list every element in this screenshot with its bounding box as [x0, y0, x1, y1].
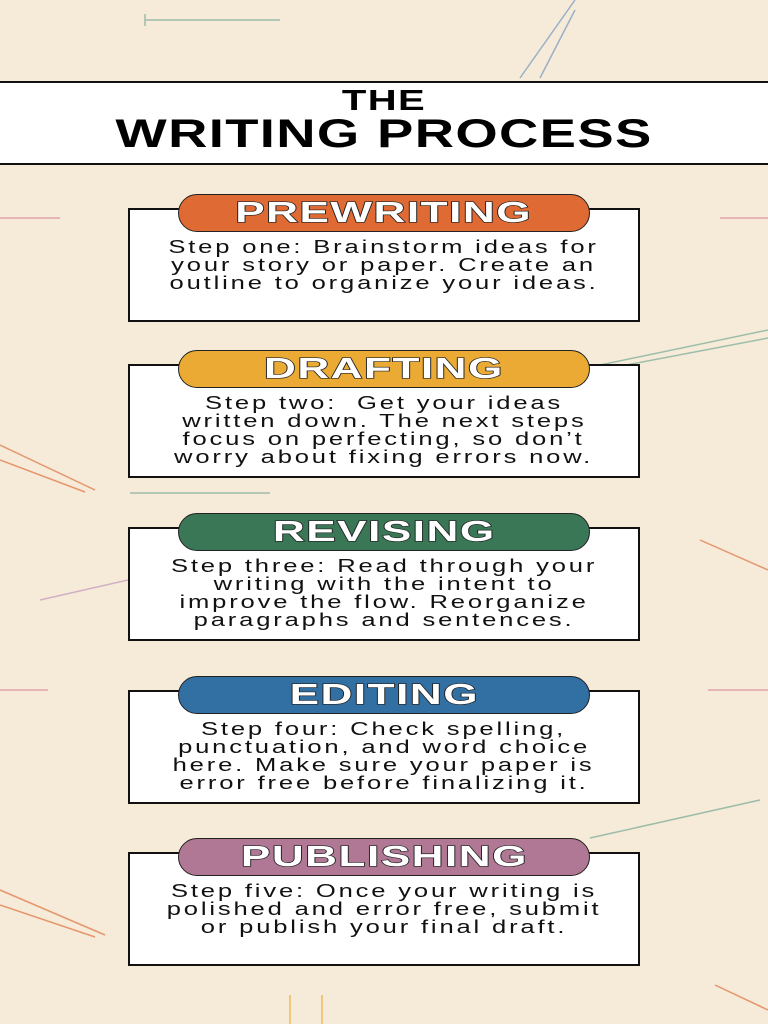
pill: publishing — [178, 838, 590, 876]
pill: revising: REVISING — [273, 516, 495, 548]
text: drafting: Step two: Get your ideas — [205, 393, 563, 413]
pill: publishing: PUBLISHING — [240, 841, 528, 873]
text: prewriting: outline to organize your ideas. — [169, 273, 599, 293]
panel: prewriting — [128, 194, 640, 322]
text: editing: here. Make sure your paper is — [173, 755, 595, 775]
text: drafting — [174, 393, 594, 467]
text: editing: Step four: Check spelling, — [201, 719, 567, 739]
text: publishing: Step five: Once your writing is — [171, 881, 597, 901]
text: publishing: polished and error free, submit — [167, 899, 601, 919]
pill: drafting: DRAFTING — [264, 353, 504, 385]
text: drafting: worry about fixing errors now. — [174, 447, 594, 467]
pill: editing — [178, 676, 590, 714]
title line 1: THE — [342, 85, 426, 117]
panel: publishing — [128, 838, 640, 966]
text: prewriting — [169, 237, 599, 293]
pill: editing: EDITING — [289, 679, 479, 711]
text: prewriting: Step one: Brainstorm ideas for — [169, 237, 599, 257]
pill: prewriting: PREWRITING — [236, 197, 532, 229]
title banner — [0, 81, 768, 165]
text: revising: paragraphs and sentences. — [194, 610, 574, 630]
text: publishing — [167, 881, 601, 937]
text: prewriting: your story or paper. Create an — [172, 255, 596, 275]
text: editing — [173, 719, 595, 793]
pill: prewriting — [178, 194, 590, 232]
panel: editing — [128, 676, 640, 804]
text: revising: Step three: Read through your — [171, 556, 597, 576]
text: revising: improve the flow. Reorganize — [179, 592, 589, 612]
panel: revising — [128, 513, 640, 641]
text: publishing: or publish your final draft. — [201, 917, 567, 937]
text: revising — [171, 556, 597, 630]
pill: revising — [178, 513, 590, 551]
text: revising: writing with the intent to — [214, 574, 554, 594]
text: drafting: focus on perfecting, so don’t — [183, 429, 585, 449]
text: drafting: written down. The next steps — [182, 411, 586, 431]
pill: drafting — [178, 350, 590, 388]
text: editing: punctuation, and word choice — [178, 737, 590, 757]
text: editing: error free before finalizing it. — [179, 773, 589, 793]
title line 2: WRITING PROCESS — [115, 112, 653, 156]
panel: drafting — [128, 350, 640, 478]
